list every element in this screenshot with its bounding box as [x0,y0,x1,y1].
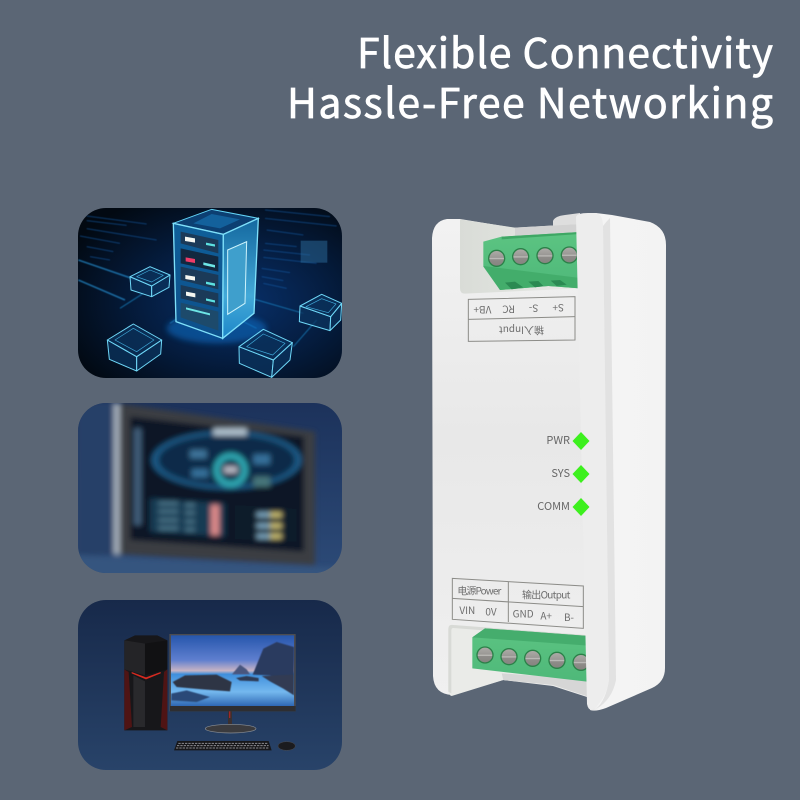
title: Flexible Connectivity [357,20,773,80]
bottom terminal window [448,578,593,698]
status LEDs: COMM [537,498,570,514]
status LEDs: SYS [551,465,570,481]
title: Hassle-Free Networking [287,70,773,130]
server rack rows [181,232,218,331]
title [287,20,773,130]
output and power label box: B- [564,609,574,624]
status LEDs [537,432,590,516]
floor glow [167,313,267,343]
panel: desktop computer image [78,600,342,770]
input label box, printed upside down: RC [502,302,515,317]
input label box, printed upside down [468,297,575,341]
device: din-rail RS485 module [432,213,666,711]
output and power label box [452,578,583,628]
bottom green terminal block [472,628,593,682]
output and power label box: 输出Output [522,587,571,602]
panel: blurred HMI touchscreen image [77,402,350,582]
device front edge strip [576,213,609,710]
input label box, printed upside down: 输入Input [499,323,544,338]
keyboard [174,741,272,750]
device right side face [590,213,666,711]
input label box, printed upside down: VB+ [473,303,491,318]
top green terminal block [483,232,580,290]
device front face [432,219,592,705]
PC tower [124,635,167,730]
output and power label box: VIN [459,602,475,617]
terminal screws [489,247,577,266]
device back tab [553,213,580,240]
server tower [173,209,258,338]
top terminal window [460,219,580,341]
output and power label box: GND [513,606,534,621]
mouse [278,742,295,750]
device edge shading [596,218,616,709]
status LEDs: PWR [546,432,570,448]
output and power label box: 0V [485,603,497,618]
output and power label box: 电源Power [457,582,501,597]
input label box, printed upside down: S- [529,302,538,317]
network node cubes [107,267,342,377]
blue panel glow [301,241,327,263]
code lines backdrop [78,210,337,347]
input label box, printed upside down: S+ [552,301,564,316]
monitor [169,634,296,733]
output and power label box: A+ [540,607,552,622]
panel: server network image [78,208,342,378]
